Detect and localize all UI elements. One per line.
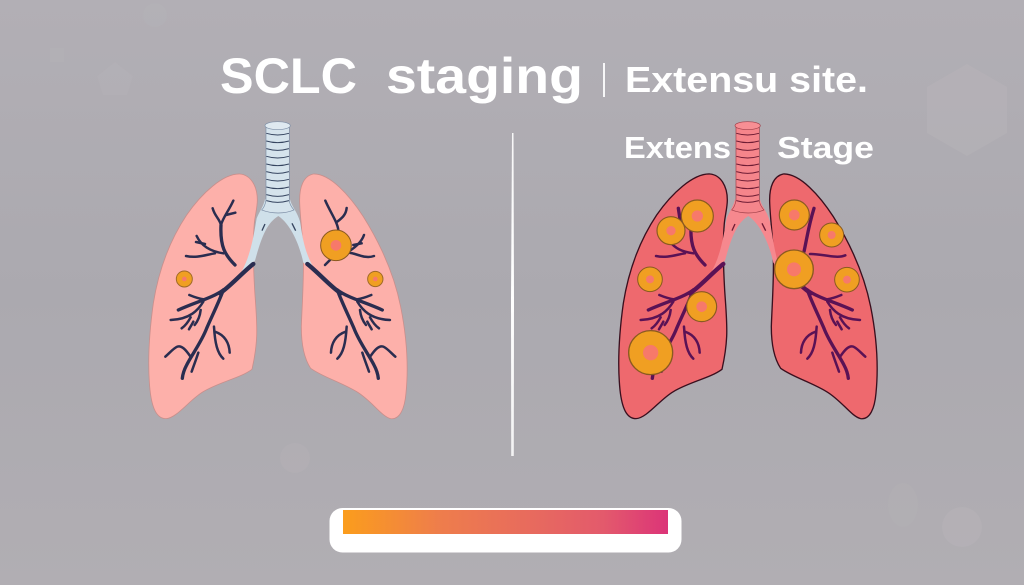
title: staging: staging bbox=[386, 48, 583, 104]
right upper airway tree bbox=[325, 201, 374, 265]
left airway tree bbox=[165, 201, 253, 378]
progress bar bbox=[330, 508, 682, 552]
left airway tree bbox=[635, 208, 723, 378]
bronchi bbox=[242, 199, 317, 273]
tumor 3 bbox=[638, 267, 662, 292]
tumors bbox=[629, 200, 859, 375]
vertical divider bbox=[511, 133, 514, 456]
left lung lobe bbox=[149, 174, 257, 419]
tumor 7 bbox=[820, 223, 844, 247]
title bbox=[220, 48, 868, 104]
tumor 8 bbox=[775, 250, 813, 289]
title: Extensu site: Extensu site. bbox=[625, 59, 868, 100]
bar track bbox=[330, 508, 682, 552]
trachea bbox=[732, 122, 766, 231]
tumor 6 bbox=[779, 200, 809, 230]
bar gradient fill bbox=[343, 510, 668, 534]
right lower airway tree bbox=[777, 264, 865, 378]
trachea bbox=[262, 122, 296, 231]
tumor 9 bbox=[835, 267, 859, 292]
right upper airway tree bbox=[804, 208, 845, 257]
label: Stage: Stage bbox=[777, 130, 874, 165]
tumor: large right bbox=[321, 230, 351, 261]
bronchi bbox=[712, 199, 780, 271]
tumor 4 bbox=[687, 292, 717, 322]
right lower airway tree bbox=[307, 264, 395, 378]
label: Extens: Extens bbox=[624, 130, 731, 165]
tumor 5 bbox=[629, 331, 673, 375]
right lung lobe bbox=[770, 174, 877, 419]
tumor 1 bbox=[681, 200, 713, 232]
left lungs: limited stage bbox=[149, 122, 407, 419]
right lungs: extensive stage bbox=[619, 122, 877, 419]
tumor: small left bbox=[176, 271, 192, 287]
title separator bbox=[603, 63, 605, 97]
tumor 2 bbox=[657, 217, 685, 245]
tumor: small right bbox=[368, 271, 383, 287]
right lung lobe bbox=[300, 174, 407, 419]
title: SCLC staging: SCLC bbox=[220, 48, 357, 104]
left lung lobe bbox=[619, 174, 727, 419]
